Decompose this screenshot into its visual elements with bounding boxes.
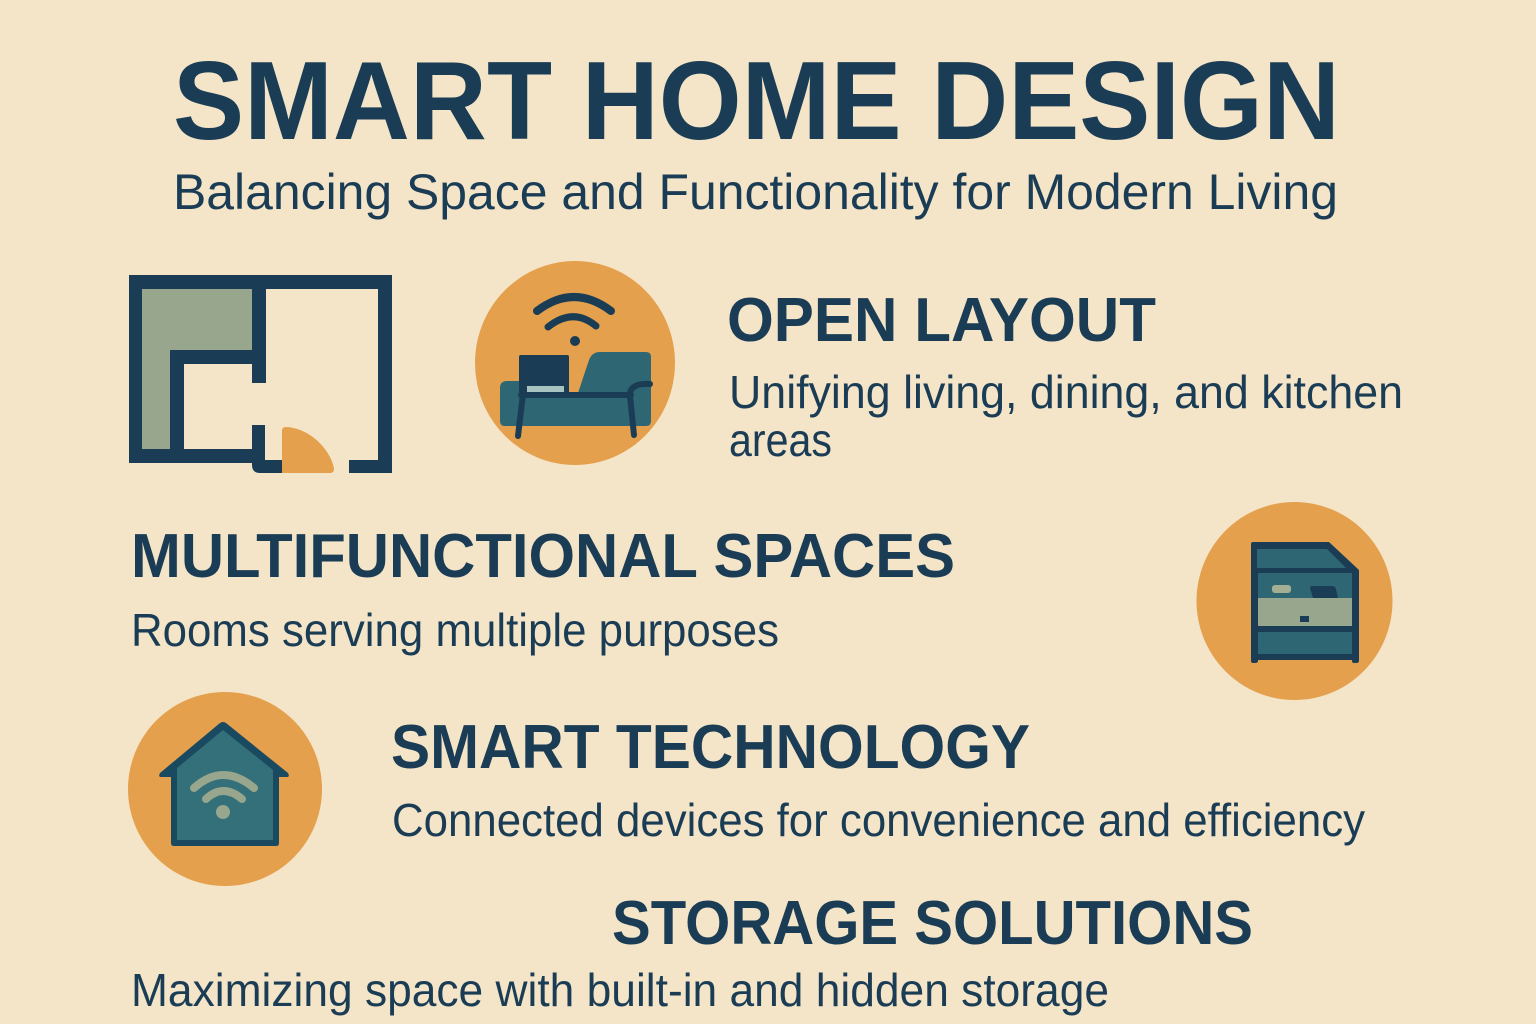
description continuation: open layout: areas <box>729 414 832 466</box>
icon: floor plan <box>129 275 392 473</box>
heading: open layout: OPEN LAYOUT <box>727 286 1156 355</box>
panel: storage solutions <box>131 889 1253 1016</box>
panel: multifunctional spaces <box>131 502 1392 700</box>
description: smart technology: Connected devices for convenience and efficiency <box>392 794 1365 846</box>
heading: multifunctional spaces: MULTIFUNCTIONAL SPACES <box>131 522 955 591</box>
header <box>173 39 1340 220</box>
title: SMART HOME DESIGN <box>173 39 1340 163</box>
icon: smart house with wifi <box>128 692 322 886</box>
heading: storage solutions: STORAGE SOLUTIONS <box>612 889 1253 958</box>
panel: open layout <box>475 261 1403 466</box>
description: storage solutions: Maximizing space with built-in and hidden storage <box>131 964 1109 1016</box>
description: open layout: Unifying living, dining, and kitchen <box>729 366 1403 418</box>
heading: smart technology: SMART TECHNOLOGY <box>391 713 1030 782</box>
panel: smart technology <box>128 692 1365 886</box>
icon: sofa with wifi <box>475 261 675 465</box>
icon: storage cabinet <box>1196 502 1392 700</box>
description: multifunctional spaces: Rooms serving multiple purposes <box>131 604 779 656</box>
subtitle: Balancing Space and Functionality for Modern Living <box>173 164 1338 220</box>
